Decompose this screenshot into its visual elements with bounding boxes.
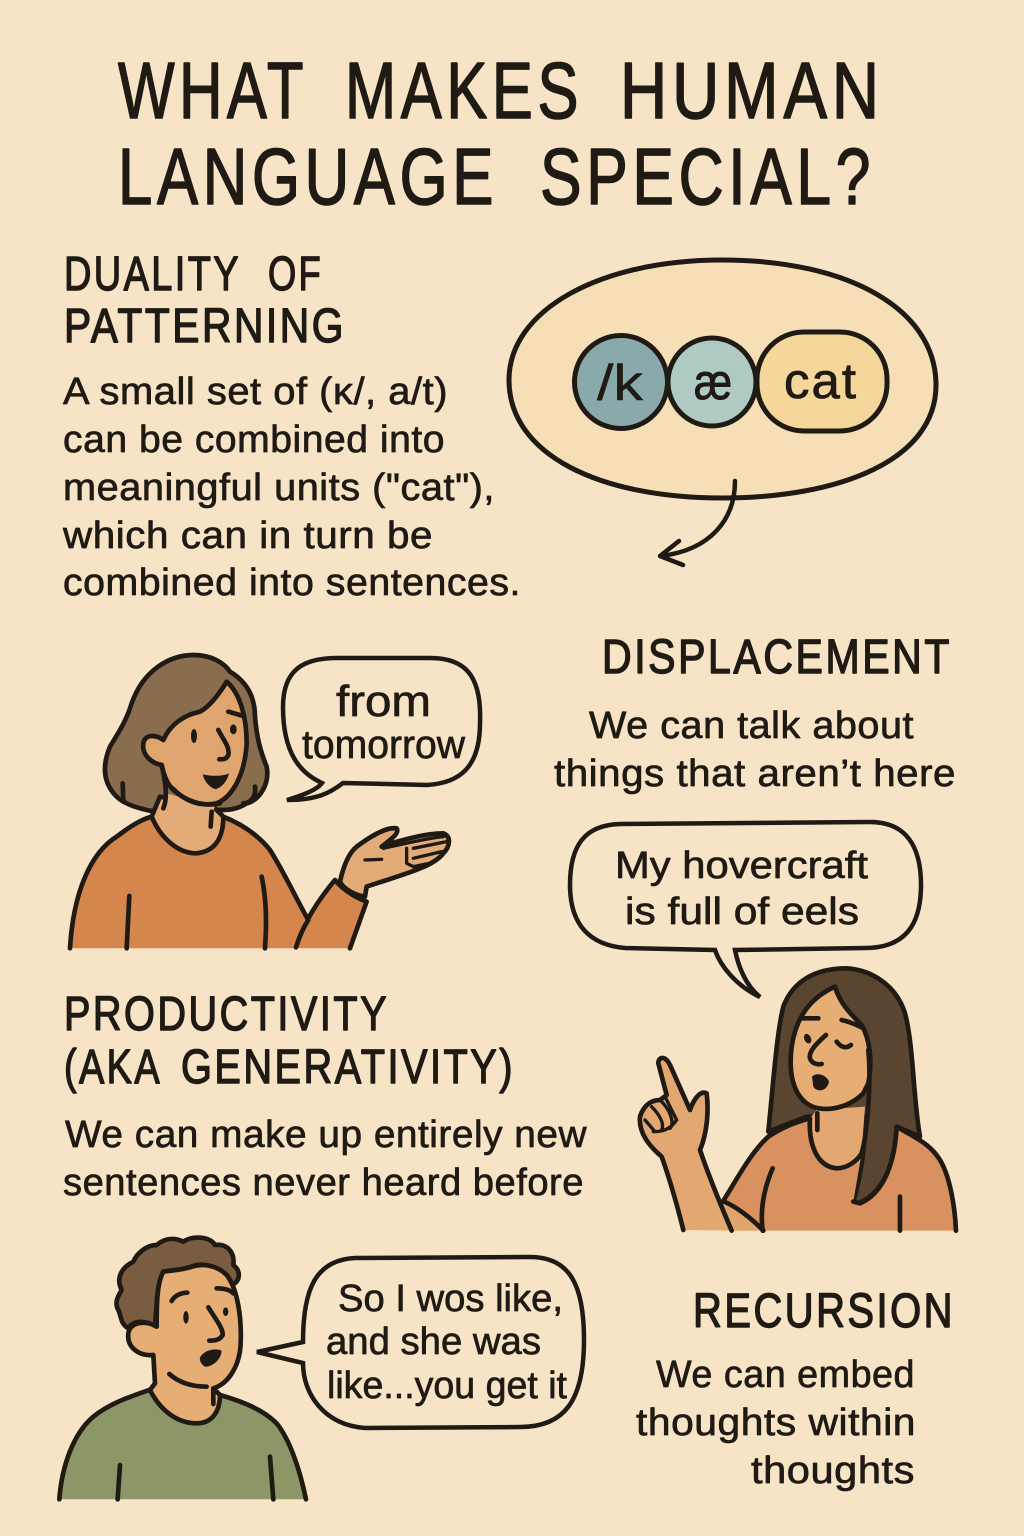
text: recursion description: We can embed	[656, 1354, 915, 1396]
speech bubble: hovercraft: is full of eels	[625, 891, 859, 933]
text: duality description: combined into sentences.	[63, 562, 521, 604]
heading: displacement: DISPLACEMENT	[602, 631, 952, 684]
person: woman pointing up	[640, 968, 956, 1231]
word pill: cat	[757, 332, 887, 431]
face details	[762, 1018, 900, 1231]
shirt	[722, 1118, 956, 1231]
heading: productivity	[64, 988, 515, 1094]
speech bubble: hovercraft	[570, 822, 921, 997]
forearm	[722, 1203, 763, 1231]
speech bubble: so I was like: like...you get it	[327, 1365, 567, 1407]
speech bubble: so I was like	[257, 1257, 584, 1428]
title	[118, 46, 884, 221]
title: LANGUAGE	[118, 132, 498, 221]
text: productivity description: sentences never heard before	[63, 1162, 584, 1204]
title: HUMAN	[620, 46, 884, 135]
face details	[123, 712, 266, 948]
phoneme circle: ae: æ	[694, 354, 732, 410]
speech bubble: from tomorrow: from	[336, 677, 431, 726]
text: productivity description: We can make up entirely new	[65, 1114, 587, 1156]
title: WHAT	[118, 46, 308, 135]
face details	[118, 1288, 273, 1499]
text: displacement description: things that aren’t here	[554, 753, 956, 795]
arrow	[660, 481, 735, 565]
face and neck	[128, 1265, 241, 1423]
phoneme circle: /k	[574, 336, 668, 428]
heading: productivity: (AKA	[64, 1041, 162, 1094]
person: woman with brown bob	[70, 655, 449, 948]
text: productivity description	[63, 1114, 587, 1204]
hair	[768, 968, 920, 1203]
heading: recursion: RECURSION	[693, 1285, 955, 1338]
neck	[152, 797, 223, 853]
text: displacement description	[554, 705, 956, 795]
text: duality description: which can in turn be	[62, 515, 433, 557]
sweater	[70, 817, 367, 948]
text: duality description	[62, 371, 521, 604]
speech bubble: so I was like: and she was	[326, 1321, 541, 1363]
phoneme circle: /k: /k	[597, 355, 644, 411]
shirt	[59, 1390, 306, 1499]
heading: duality of patterning: OF	[268, 248, 323, 301]
text: duality description: meaningful units ("cat"),	[63, 467, 495, 509]
text: recursion description: thoughts within	[636, 1402, 916, 1444]
heading: productivity: PRODUCTIVITY	[64, 988, 389, 1041]
speech bubble: hovercraft: My hovercraft	[615, 845, 868, 887]
hand	[640, 1058, 732, 1231]
hand	[340, 828, 449, 897]
text: recursion description: thoughts	[751, 1450, 915, 1492]
hair	[105, 655, 267, 812]
title: MAKES	[345, 46, 583, 135]
speech bubble: from tomorrow: tomorrow	[302, 723, 465, 767]
title: SPECIAL?	[540, 132, 875, 221]
heading: duality of patterning	[64, 248, 346, 353]
phoneme circle: ae	[668, 338, 756, 426]
person: curly-haired man	[59, 1238, 306, 1499]
heading: duality of patterning: DUALITY	[64, 248, 241, 301]
face	[791, 987, 870, 1109]
speech bubble: so I was like: So I wos like,	[338, 1278, 563, 1320]
heading: duality of patterning: PATTERNING	[64, 300, 346, 353]
diagram: phoneme bubble	[509, 260, 936, 498]
face	[143, 682, 247, 804]
text: recursion description	[636, 1354, 916, 1492]
text: duality description: A small set of (κ/, a/t)	[63, 371, 448, 413]
heading: productivity: GENERATIVITY)	[181, 1041, 515, 1094]
text: displacement description: We can talk about	[589, 705, 914, 747]
text: duality description: can be combined into	[63, 419, 445, 461]
hair	[116, 1238, 239, 1328]
word pill: cat: cat	[784, 353, 858, 409]
speech bubble: from tomorrow	[283, 658, 480, 800]
bubble outline	[509, 260, 936, 498]
neck	[810, 1107, 865, 1168]
